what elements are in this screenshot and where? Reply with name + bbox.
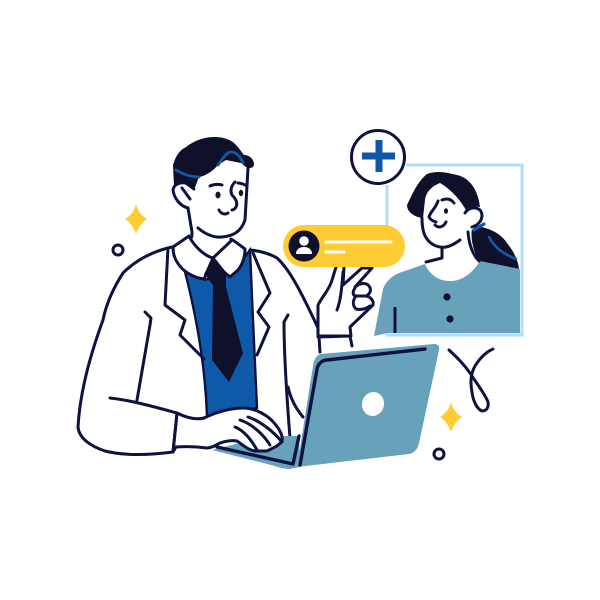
laptop edges bbox=[217, 349, 425, 465]
coat fold left bbox=[137, 312, 151, 400]
shirt fold bbox=[394, 307, 396, 333]
laptop logo bbox=[360, 390, 386, 418]
patient neck and face bbox=[423, 183, 482, 281]
laptop base bbox=[212, 436, 300, 469]
tie knot bbox=[204, 258, 226, 285]
message lines bbox=[326, 242, 391, 252]
vest bbox=[184, 250, 257, 416]
neck and jaw lines bbox=[188, 168, 248, 238]
ring right bbox=[434, 449, 444, 459]
laptop screen bbox=[297, 344, 439, 467]
panel: patient video frame bbox=[374, 165, 522, 336]
patient ponytail bbox=[471, 226, 519, 269]
avatar bbox=[288, 230, 320, 262]
patient shirt bbox=[374, 261, 520, 336]
patient hair bbox=[407, 172, 480, 218]
right coat shoulder and arm bbox=[250, 250, 318, 328]
ear bbox=[173, 183, 194, 208]
patient face lines bbox=[422, 199, 482, 262]
coat outline bbox=[78, 247, 173, 454]
frame bottom edge bbox=[386, 333, 522, 337]
typing hand bbox=[110, 398, 282, 452]
hand and sleeve cuff bbox=[173, 408, 282, 452]
sleeve edge bbox=[110, 398, 177, 452]
tie bbox=[205, 258, 243, 382]
finger lines bbox=[337, 272, 370, 310]
icon: medical plus bbox=[352, 130, 404, 184]
face details bbox=[182, 182, 245, 214]
collar bbox=[173, 236, 245, 279]
frame border bbox=[386, 165, 522, 335]
raised hand bbox=[318, 262, 373, 352]
laptop bbox=[212, 344, 439, 469]
squiggle bbox=[449, 349, 493, 411]
doctor bbox=[78, 137, 318, 454]
finger lines bbox=[235, 417, 282, 450]
ring left bbox=[113, 245, 123, 255]
ponytail highlight bbox=[489, 237, 516, 259]
hair bbox=[173, 137, 254, 190]
profile message badge bbox=[283, 225, 405, 267]
shirt buttons bbox=[443, 293, 454, 323]
right lapel bbox=[253, 253, 270, 355]
cuff bbox=[318, 336, 352, 352]
hair highlights bbox=[176, 152, 243, 177]
hair tie bbox=[474, 224, 484, 230]
sparkle right bbox=[440, 402, 462, 432]
sparkle left bbox=[125, 204, 147, 234]
left lapel bbox=[165, 248, 204, 359]
coat fold right bbox=[284, 315, 303, 438]
head bbox=[173, 165, 248, 237]
badge pill bbox=[283, 225, 405, 267]
hand shape bbox=[318, 262, 373, 336]
